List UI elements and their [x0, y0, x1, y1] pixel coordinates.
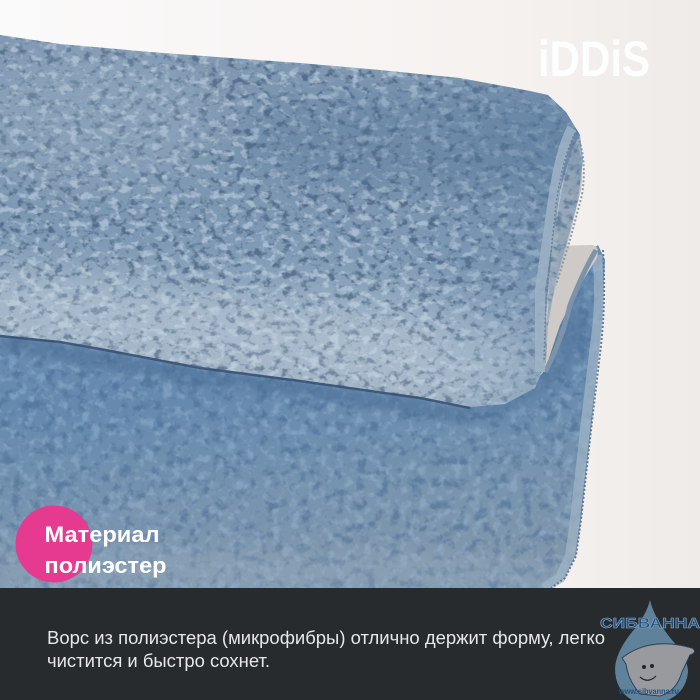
water drop — [615, 600, 688, 700]
pink circle — [16, 506, 92, 582]
badge label: Материал — [44, 522, 160, 547]
badge: material — [16, 506, 166, 582]
mat underside, ribbed backing — [530, 137, 598, 388]
watermark name: СИБВАННА — [600, 615, 700, 632]
watermark logo: Sibvanna — [600, 600, 700, 700]
caption text — [47, 628, 605, 671]
rolled mat bound edge — [540, 128, 572, 372]
caption text: Ворс из полиэстера (микрофибры) отлично держит форму, легко — [47, 628, 605, 648]
smiling bathtub — [622, 644, 695, 696]
caption text: чистится и быстро сохнет. — [47, 651, 270, 671]
brand logo: IDDIS: iDDiS — [538, 31, 650, 87]
bound edge of flat mat — [544, 255, 599, 588]
rolled bath mat — [0, 30, 590, 415]
flat bath mat — [0, 240, 620, 590]
badge label — [44, 522, 166, 578]
caption panel — [0, 588, 700, 700]
badge label: полиэстер — [44, 553, 166, 578]
watermark url: www.sibvanna.ru — [618, 687, 679, 696]
